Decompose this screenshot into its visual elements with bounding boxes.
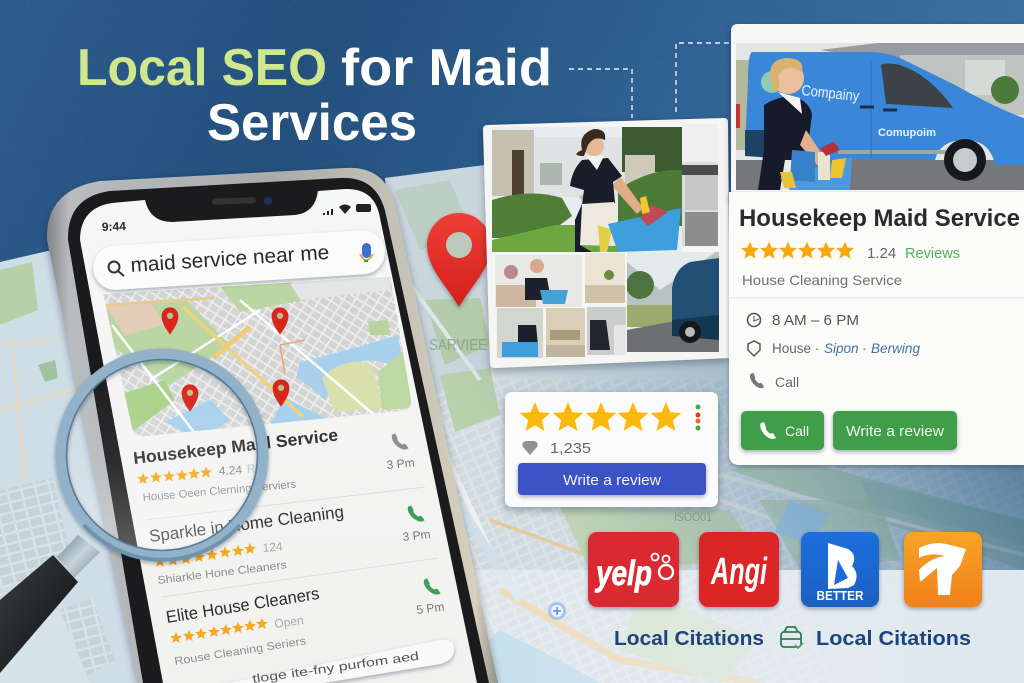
title: for Maid <box>341 39 552 97</box>
address: · <box>862 341 866 356</box>
panel photo: maid and blue van: Comupoim <box>878 127 936 139</box>
logo: orange T <box>904 532 982 607</box>
hours: 8 AM – 6 PM <box>772 312 859 329</box>
small photo: maid in doorway <box>587 307 626 355</box>
logo: Angi: Angi <box>710 551 768 593</box>
phone silver frame <box>47 168 498 683</box>
listing 2: Sparkle in Home Cleaning <box>148 502 345 546</box>
local citations captions: Local Citations <box>816 628 971 650</box>
map locate marker <box>548 602 566 620</box>
local citations captions: Local Citations <box>614 628 764 650</box>
write a review button: Write a review <box>846 424 945 440</box>
handle <box>0 535 100 673</box>
review count: 1,235 <box>550 440 591 457</box>
front camera <box>212 197 272 205</box>
review count: 1.24 <box>867 245 896 262</box>
magnifying glass <box>0 354 263 673</box>
listing 2: 124 <box>262 539 284 555</box>
local citations captions <box>614 627 971 650</box>
call button: Call <box>785 423 809 439</box>
phone black bezel <box>68 178 489 683</box>
write a review button <box>833 411 957 450</box>
pin icon <box>522 441 538 455</box>
logo: yelp: yelp <box>594 554 652 593</box>
business profile panel <box>725 24 1024 465</box>
listing 1: Housekeep Maid Service <box>132 425 339 468</box>
review count: Reviews <box>905 245 960 262</box>
category: House Cleaning Service <box>742 272 902 288</box>
map label: zip: ISOO01 <box>674 510 712 524</box>
map sheet: right side <box>380 160 1024 683</box>
blue button <box>518 463 706 495</box>
panel photo card <box>731 24 1024 200</box>
mic icon <box>360 243 373 261</box>
listing 2: 3 Pm <box>402 527 431 544</box>
title: Services <box>207 94 417 152</box>
listing 3: Open <box>273 613 304 631</box>
call row: Call <box>775 374 799 390</box>
lens rim <box>61 354 263 560</box>
icon: citation card check <box>781 627 803 648</box>
call button <box>741 411 824 450</box>
call row <box>750 373 799 390</box>
large red map pin <box>427 213 491 307</box>
map sheet: left side <box>0 250 150 683</box>
blue button: Write a review <box>563 473 662 489</box>
card background <box>483 118 730 368</box>
search bar: maid service near me <box>130 241 330 277</box>
small photo: maid at table <box>495 255 582 307</box>
five gold stars <box>520 402 681 431</box>
panel photo: maid and blue van: Compainy <box>801 82 860 105</box>
search icon <box>108 262 124 276</box>
main photo: maid outside a house <box>492 127 682 252</box>
panel info card <box>725 192 1024 465</box>
listing 3: 5 Pm <box>416 600 445 617</box>
status bar: 9:44 <box>102 219 126 234</box>
title <box>77 39 552 152</box>
address: Berwing <box>871 341 920 356</box>
small photo: room <box>546 308 585 357</box>
listing 2 <box>148 502 431 587</box>
logo: BETTER: BETTER <box>816 588 864 603</box>
listing 1 <box>132 425 415 504</box>
listing 1: Re <box>246 461 263 476</box>
side tile: grey furniture <box>682 124 718 246</box>
panel photo: maid and blue van <box>732 33 1024 190</box>
status dots <box>696 404 700 430</box>
review card <box>505 392 718 507</box>
small photo: parked van <box>626 250 719 352</box>
address: House · <box>772 341 819 356</box>
status bar <box>102 204 371 234</box>
address: Sipon <box>824 341 859 356</box>
listing 3: Elite House Cleaners <box>165 584 321 627</box>
small photo: kitchen counter <box>585 253 625 303</box>
review count <box>867 245 960 262</box>
small photo: maid with bucket <box>497 308 543 358</box>
listing 1: 4.24 <box>218 463 243 478</box>
search bar <box>92 229 386 291</box>
dashed connector lines <box>569 43 738 118</box>
address <box>748 341 920 356</box>
business name: Housekeep Maid Service <box>739 205 1020 232</box>
phone <box>47 168 498 683</box>
map pins in phone <box>162 307 289 412</box>
rating stars <box>741 242 854 259</box>
lens <box>65 358 259 552</box>
phone screen <box>80 189 477 683</box>
listing 1: 3 Pm <box>386 456 415 472</box>
logo: BETTER <box>801 532 879 607</box>
map label: SARVIEE <box>429 337 487 354</box>
title: Local SEO <box>77 39 327 97</box>
bottom pill <box>195 640 454 683</box>
listing 1: House Oeen Clerning Serviers <box>142 479 297 504</box>
listing 2: Shiarkle Hone Cleaners <box>157 559 288 587</box>
citation logos <box>588 532 982 607</box>
listing 3 <box>165 577 445 668</box>
listing 3: Rouse Cleaning Seriers <box>174 635 307 668</box>
phone map <box>100 270 420 440</box>
logo: Angi <box>699 532 779 607</box>
logo: yelp <box>588 532 679 607</box>
photo collage card <box>483 118 730 368</box>
